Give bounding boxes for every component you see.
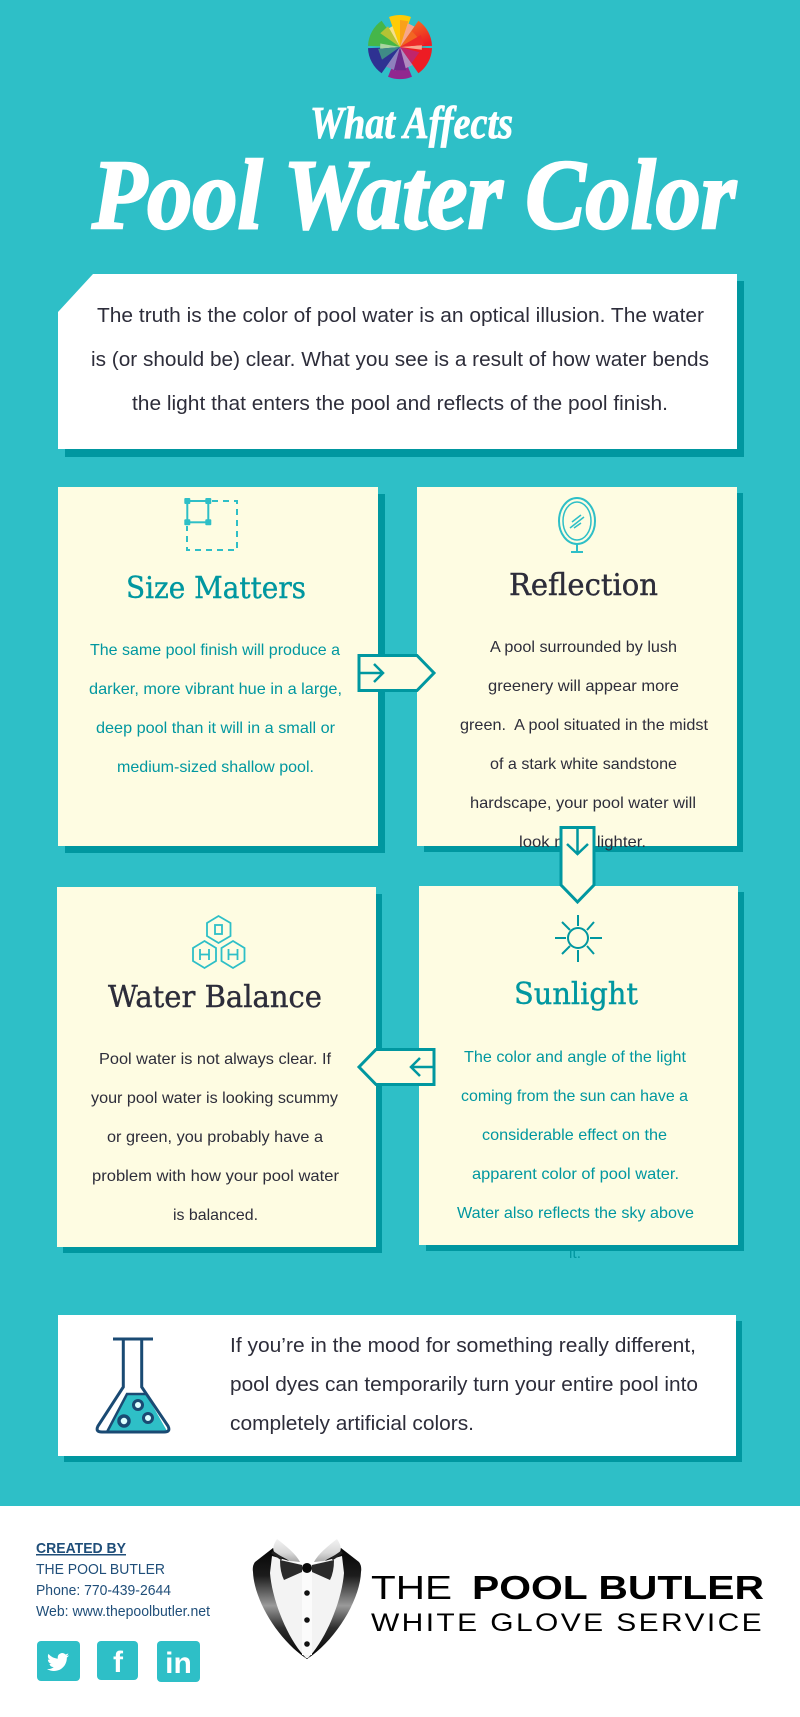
- text: size matters: medium-sized shallow pool.: [117, 759, 314, 776]
- intro text: is (or should be) clear. What you see is a result of how water bends: [91, 349, 709, 371]
- text: water balance: [91, 1051, 340, 1224]
- text: water balance: your pool water is looking scummy: [91, 1090, 338, 1107]
- icon: resize square: [184, 498, 237, 550]
- credits text: THE POOL BUTLER: [36, 1561, 165, 1578]
- text: pool dyes: pool dyes can temporarily turn your entire pool into: [230, 1373, 698, 1396]
- text: sunlight: [457, 1049, 694, 1262]
- text: sunlight: Water also reflects the sky above: [457, 1205, 694, 1222]
- icon: water molecule: [193, 916, 244, 968]
- panel: pool dyes callout: [58, 1315, 742, 1462]
- intro text: [91, 305, 709, 415]
- credits text: Phone: 770-439-2644: [36, 1582, 171, 1599]
- arrow: size matters to reflection: [359, 656, 434, 690]
- icon: facebook: f: [113, 1646, 124, 1679]
- text: reflection: look more lighter.: [519, 834, 646, 851]
- text: reflection: A pool surrounded by lush: [490, 639, 677, 656]
- title: [91, 98, 737, 250]
- text: water balance: is balanced.: [173, 1207, 258, 1224]
- panel: size matters: [58, 487, 385, 853]
- text: reflection: of a stark white sandstone: [490, 756, 677, 773]
- heading: water balance: Water Balance: [108, 980, 322, 1015]
- text: size matters: The same pool finish will produce a: [90, 642, 340, 659]
- text: pool dyes: completely artificial colors.: [230, 1412, 474, 1435]
- panel: reflection: [417, 487, 743, 852]
- icon: twitter: [37, 1641, 80, 1681]
- logo wordmark: POOL BUTLER: [472, 1569, 764, 1606]
- panel: sunlight: [419, 886, 744, 1262]
- text: water balance: Pool water is not always clear. If: [99, 1051, 332, 1068]
- text: pool dyes: If you’re in the mood for something really different,: [230, 1334, 696, 1357]
- footer panel: [0, 1506, 800, 1717]
- text: sunlight: apparent color of pool water.: [472, 1166, 679, 1183]
- logo wordmark: [371, 1569, 764, 1637]
- title line 1: What Affects: [310, 98, 513, 148]
- text: size matters: darker, more vibrant hue in a large,: [89, 681, 342, 698]
- text: reflection: green. A pool situated in the midst: [460, 717, 709, 734]
- credits text: Web: www.thepoolbutler.net: [36, 1603, 211, 1620]
- bow tie: [280, 1560, 302, 1580]
- logo wordmark: WHITE GLOVE SERVICE: [371, 1609, 764, 1637]
- text: reflection: greenery will appear more: [488, 678, 679, 695]
- text: sunlight: considerable effect on the: [482, 1127, 667, 1144]
- arrow: sunlight to water balance: [359, 1050, 434, 1084]
- credits text: [36, 1540, 211, 1620]
- icon: mirror: [559, 498, 595, 552]
- arrow: reflection to sunlight: [561, 828, 594, 902]
- icon: flask: [97, 1339, 169, 1432]
- heading: sunlight: Sunlight: [514, 977, 638, 1012]
- icon: sun: [555, 915, 602, 962]
- text: water balance: or green, you probably have a: [107, 1129, 323, 1146]
- icon: facebook: [97, 1641, 138, 1680]
- heading: reflection: Reflection: [509, 568, 658, 603]
- text: reflection: [460, 639, 709, 851]
- intro text: the light that enters the pool and reflects of the pool finish.: [132, 393, 668, 415]
- icon: linkedin: [157, 1641, 200, 1682]
- shirt: [270, 1556, 344, 1658]
- panel: intro: [58, 274, 744, 457]
- text: size matters: deep pool than it will in a small or: [96, 720, 336, 737]
- icon: color wheel: [368, 15, 432, 79]
- title line 2: Pool Water Color: [91, 139, 737, 250]
- text: sunlight: The color and angle of the light: [464, 1049, 687, 1066]
- credits text: CREATED BY: [36, 1540, 126, 1557]
- text: sunlight: coming from the sun can have a: [461, 1088, 688, 1105]
- panel: water balance: [57, 887, 382, 1253]
- text: size matters: [89, 642, 342, 776]
- icon: tuxedo logo: [253, 1539, 361, 1659]
- heading: size matters: Size Matters: [126, 571, 306, 606]
- text: sunlight: it.: [569, 1245, 581, 1262]
- collar: [273, 1539, 300, 1562]
- tuxedo lapels: [253, 1548, 361, 1659]
- icon: linkedin: in: [165, 1647, 192, 1680]
- intro text: The truth is the color of pool water is an optical illusion. The water: [97, 305, 704, 327]
- text: water balance: problem with how your pool water: [92, 1168, 340, 1185]
- text: reflection: hardscape, your pool water will: [470, 795, 696, 812]
- text: pool dyes: [230, 1334, 698, 1435]
- logo wordmark: THE: [371, 1569, 452, 1606]
